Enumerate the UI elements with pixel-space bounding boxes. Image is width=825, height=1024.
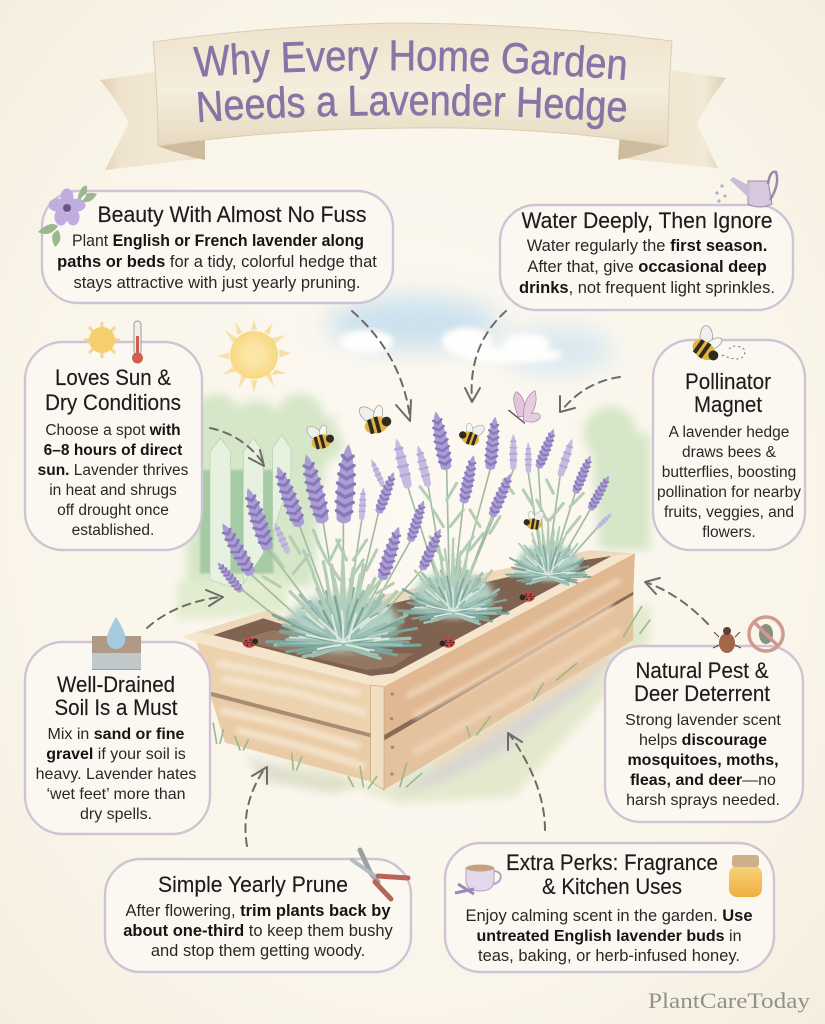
banner left tail <box>100 72 205 170</box>
panel: extra perks: & Kitchen Uses <box>542 874 682 899</box>
panel: extra perks: teas, baking, or herb-infused honey. <box>478 947 740 965</box>
foliage background <box>177 393 650 620</box>
icon: flower <box>38 186 97 247</box>
panel: well-drained soil: gravel if your soil is <box>46 746 186 763</box>
ladybug 3 <box>520 592 535 602</box>
panel: beauty with almost no fuss: paths or beds for a tidy, colorful hedge that <box>57 253 377 271</box>
arrow: pest to bed <box>645 578 708 624</box>
heading: Natural Pest & <box>636 658 768 683</box>
heading: Loves Sun & <box>55 365 171 390</box>
panel: loves sun: Dry Conditions <box>45 390 181 415</box>
body text: Strong lavender scent <box>625 712 781 729</box>
heading: Pollinator <box>685 369 771 394</box>
icon: thermometer <box>132 321 143 364</box>
wood grain left <box>217 663 367 767</box>
butterfly <box>508 391 540 423</box>
bee 2 <box>303 419 336 452</box>
heading: Water Deeply, Then Ignore <box>522 208 772 233</box>
body text: Plant English or French lavender along <box>72 232 364 250</box>
panel: natural pest & deer deterrent: helps discourage <box>639 732 767 749</box>
body text: Water regularly the first season. <box>527 237 767 255</box>
icon: bee <box>685 320 731 366</box>
banner right tail <box>618 70 726 168</box>
panel: loves sun <box>25 321 202 550</box>
stem leaves <box>263 480 583 597</box>
heading: Beauty With Almost No Fuss <box>98 202 366 227</box>
wood grain right <box>407 580 620 767</box>
heading: Well-Drained <box>57 672 175 697</box>
lavender spikes <box>215 410 613 594</box>
rim <box>182 553 635 687</box>
arrow: pollinator to plants <box>560 377 620 412</box>
fence <box>200 435 291 587</box>
body text: After flowering, trim plants back by <box>125 902 391 920</box>
right planks <box>384 553 635 735</box>
body text: Enjoy calming scent in the garden. Use <box>465 907 753 925</box>
title text: Why Every Home Garden <box>193 40 626 83</box>
bee 3 <box>457 417 488 449</box>
soil <box>213 556 612 676</box>
body text: Mix in sand or fine <box>48 726 185 743</box>
title text <box>193 40 626 130</box>
panel: water deeply <box>500 172 793 310</box>
banner fold shadows <box>158 139 668 160</box>
arrow: prune to bed <box>245 767 267 846</box>
ground wash <box>210 600 650 803</box>
plant foliage <box>267 519 590 658</box>
arrow: soil to plants <box>147 590 223 628</box>
panel: extra perks: untreated English lavender buds in <box>477 928 741 945</box>
bee 1 <box>354 398 393 437</box>
panel: well-drained soil: ‘wet feet’ more than <box>46 786 186 803</box>
panel: water deeply: After that, give occasional deep <box>527 258 767 276</box>
title banner <box>100 22 726 170</box>
ladybug 1 <box>242 637 259 648</box>
panel: pollinator magnet: butterflies, boosting <box>662 464 796 481</box>
panel: natural pest & deer deterrent: harsh sprays needed. <box>626 792 780 809</box>
panel: beauty with almost no fuss <box>38 186 393 303</box>
panel: loves sun: off drought once <box>57 502 169 519</box>
panel: simple yearly prune <box>105 850 411 972</box>
front-left planks <box>197 643 371 733</box>
heading: Extra Perks: Fragrance <box>506 850 718 875</box>
arrow: water to plants <box>465 311 506 402</box>
panel: well-drained soil: heavy. Lavender hates <box>36 766 196 783</box>
pale lavender spikes <box>272 434 614 555</box>
panel: loves sun: in heat and shrugs <box>49 482 177 499</box>
plant stems <box>238 468 597 643</box>
panel: beauty with almost no fuss: stays attractive with just yearly pruning. <box>73 274 361 292</box>
icon: soil with water drop <box>92 617 141 670</box>
panel: natural pest & deer deterrent: fleas, and deer—no <box>630 772 776 789</box>
arrow: sun to plants <box>210 428 264 466</box>
body text: Choose a spot with <box>45 422 181 439</box>
panel: simple yearly prune: and stop them getting woody. <box>151 942 365 960</box>
panel: natural pest & deer deterrent: mosquitoes, moths, <box>627 752 779 769</box>
panel: pollinator magnet <box>653 320 805 550</box>
bed back inner <box>182 550 635 687</box>
panel: extra perks <box>445 843 774 972</box>
body text: A lavender hedge <box>669 424 789 441</box>
icon: beetle <box>713 627 741 653</box>
sun <box>217 320 292 393</box>
watermark: PlantCareToday <box>648 988 810 1013</box>
heading: Simple Yearly Prune <box>158 872 348 897</box>
icon: honey jar <box>729 855 762 897</box>
panel: well-drained soil: dry spells. <box>80 806 152 823</box>
title text: Needs a Lavender Hedge <box>198 84 626 130</box>
corner post <box>371 685 384 790</box>
panel: simple yearly prune: about one-third to keep them bushy <box>123 922 394 940</box>
icon: no bugs sign <box>749 617 783 651</box>
clouds <box>340 328 563 363</box>
raised wooden bed <box>182 550 635 790</box>
panel: pollinator magnet: pollination for nearby <box>657 484 801 501</box>
panel: loves sun: 6–8 hours of direct <box>44 442 182 459</box>
panel: natural pest & deer deterrent <box>605 617 803 822</box>
arrow: extras to bed <box>508 733 545 830</box>
panel: well-drained soil <box>25 617 210 834</box>
panel: well-drained soil: Soil Is a Must <box>54 695 178 720</box>
panel: pollinator magnet: flowers. <box>702 524 756 541</box>
icon: sun <box>84 322 120 358</box>
arrow: beauty to plants <box>352 311 411 421</box>
icon: teacup <box>455 864 501 894</box>
bee 4 <box>523 507 547 531</box>
panel: natural pest & deer deterrent: Deer Deterrent <box>634 681 771 706</box>
panel: pollinator magnet: Magnet <box>694 392 763 417</box>
panel: water deeply: drinks, not frequent light sprinkles. <box>519 279 775 297</box>
icon: watering can <box>715 172 777 207</box>
panel: pollinator magnet: draws bees & <box>682 444 777 461</box>
garden illustration <box>177 297 650 803</box>
ladybug 2 <box>440 638 455 648</box>
grass tufts <box>213 607 650 788</box>
panel: loves sun: sun. Lavender thrives <box>38 462 189 479</box>
panel: pollinator magnet: fruits, veggies, and <box>664 504 794 521</box>
panel: loves sun: established. <box>72 522 154 539</box>
icon: pruning shears <box>352 850 408 899</box>
sky wash <box>327 297 613 373</box>
banner main <box>153 23 672 146</box>
